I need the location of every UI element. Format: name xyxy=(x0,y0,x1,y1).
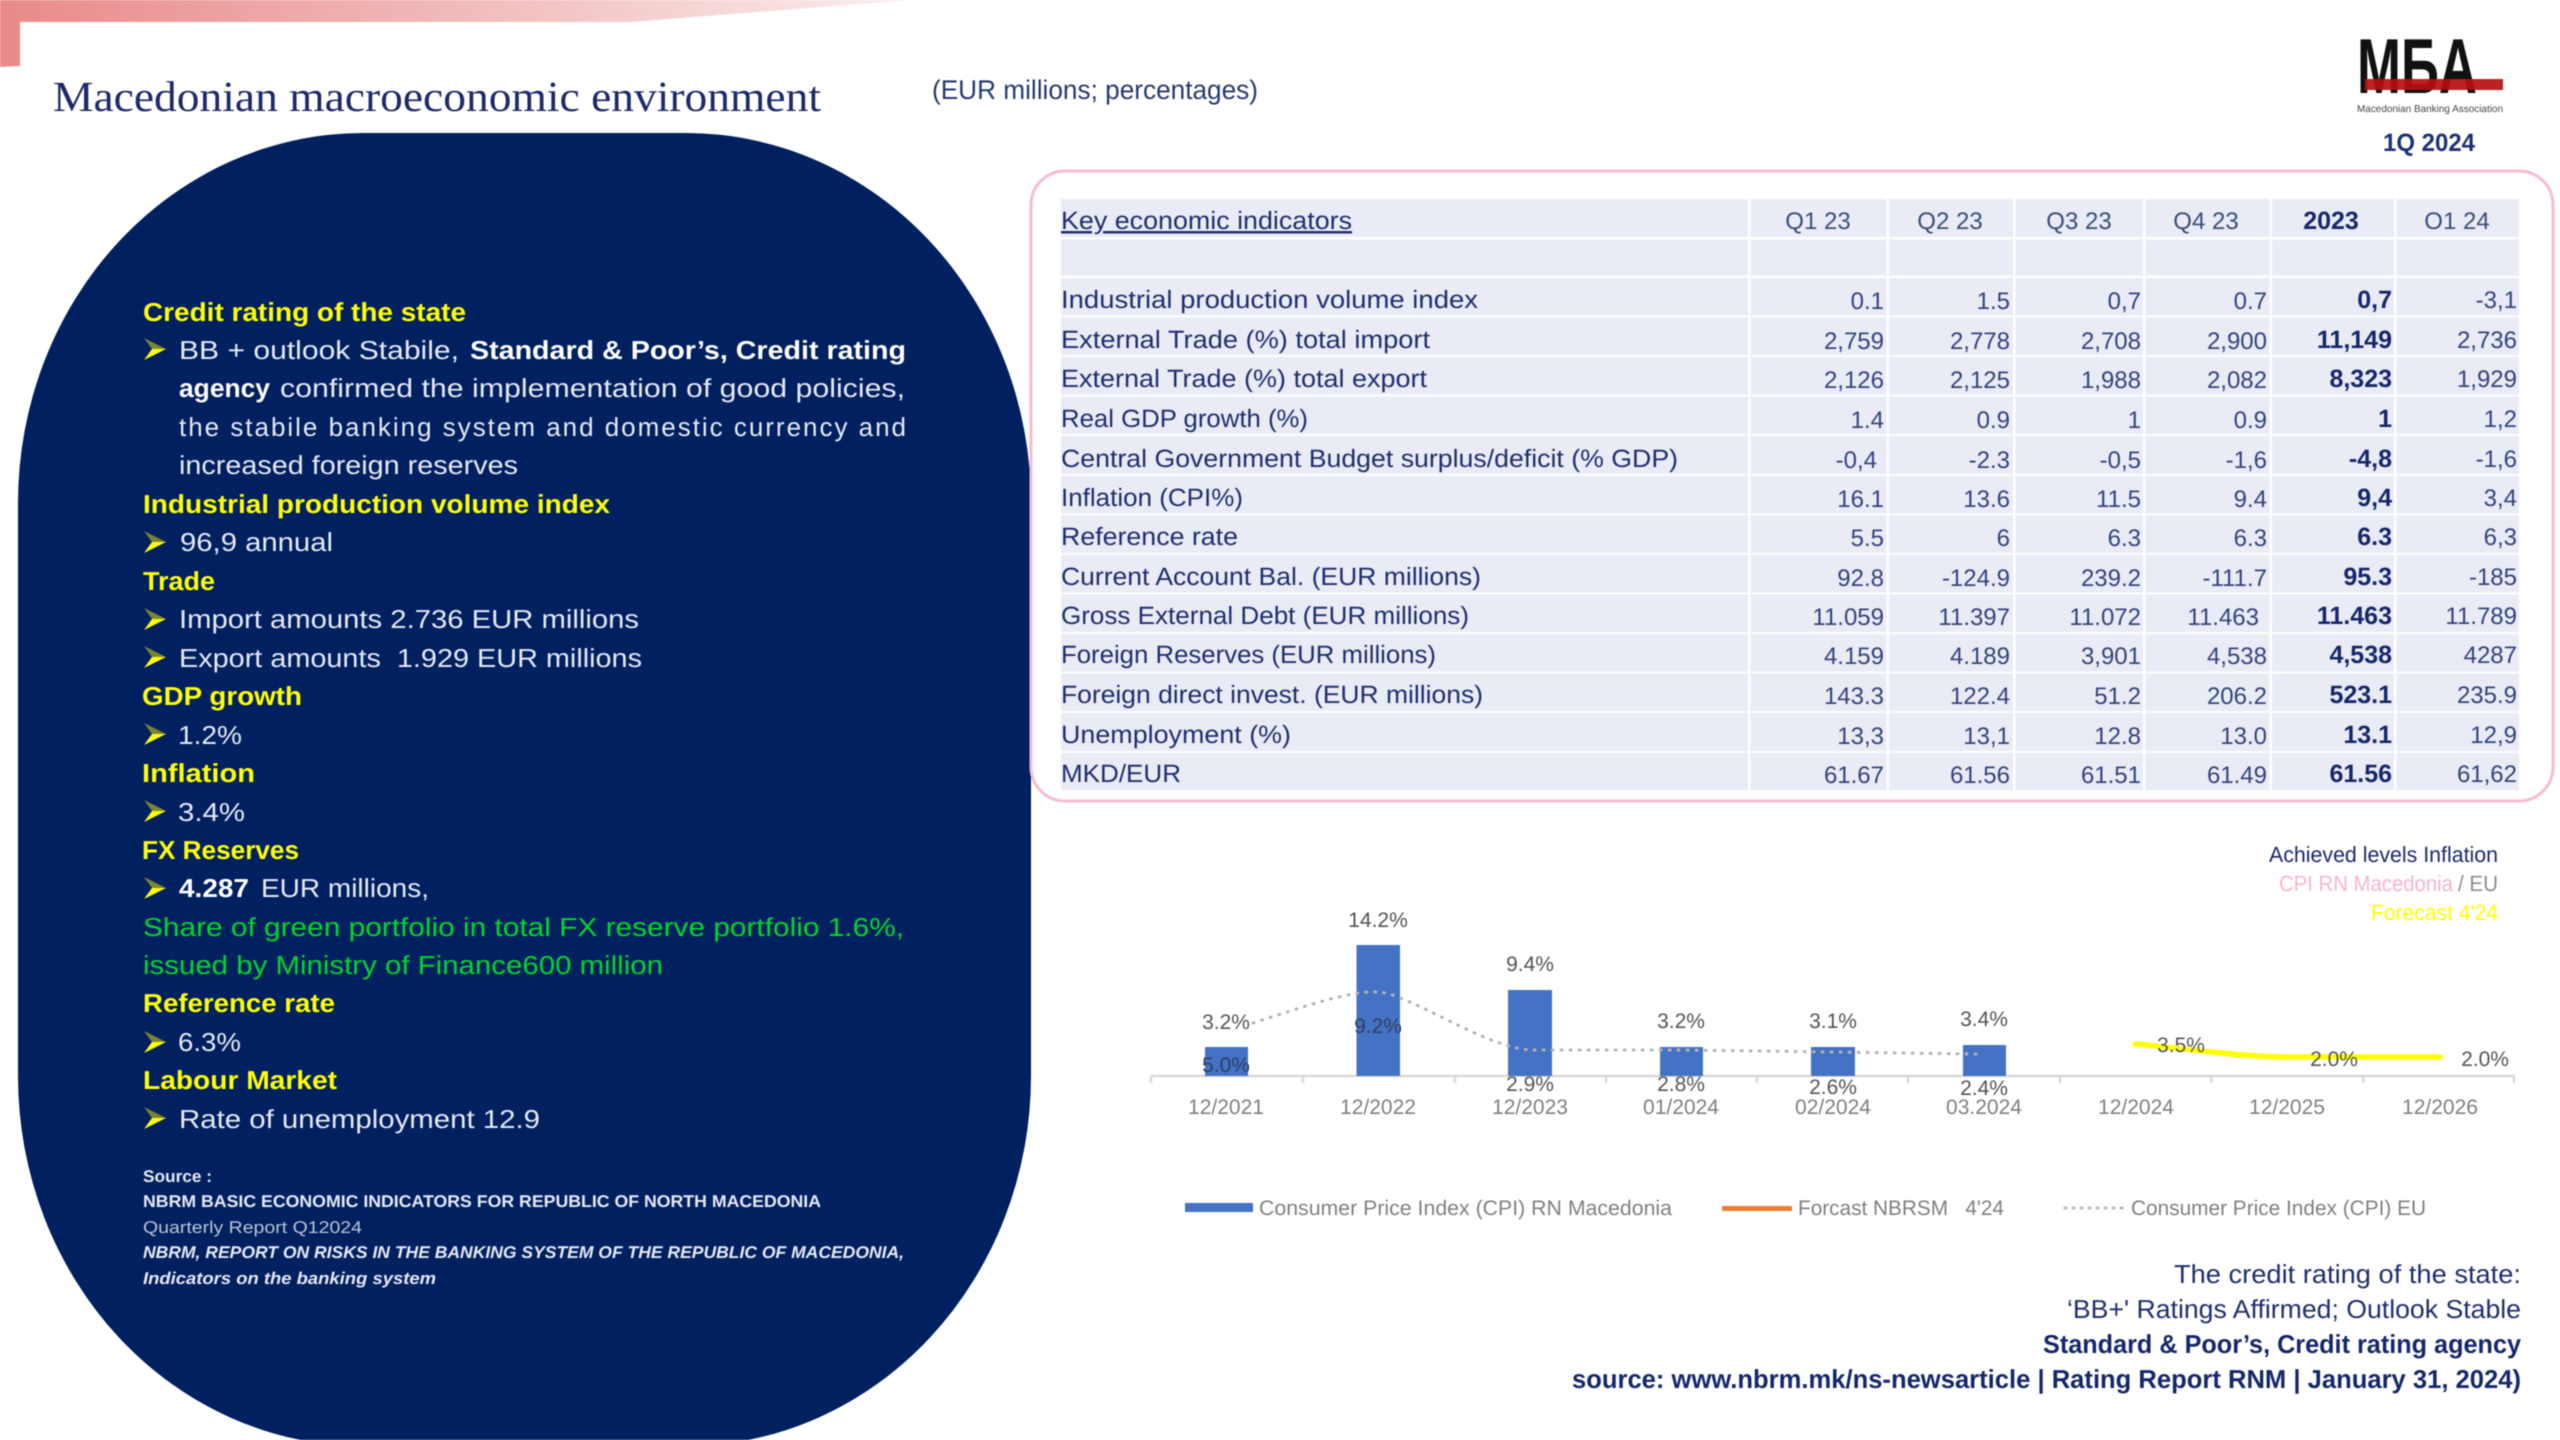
EU CPI dotted line xyxy=(1253,992,1979,1054)
chart title block: Forecast 4'24 xyxy=(2371,900,2498,925)
row: total import: 2,759 xyxy=(1824,328,1884,355)
row: industrial production: 0.7 xyxy=(2234,288,2267,315)
x axis labels: 01/2024 xyxy=(1643,1096,1719,1119)
row: MKD/EUR: 61.67 xyxy=(1824,762,1884,789)
row: industrial production: Industrial production volume index xyxy=(1061,286,1479,314)
row: real GDP growth: 1,2 xyxy=(2484,406,2517,433)
row: current account xyxy=(1061,563,2517,592)
row: external debt: 11.059 xyxy=(1812,604,1884,631)
row: unemployment: 13,1 xyxy=(1963,723,2010,750)
row: budget balance: Central Government Budget surplus/deficit (% GDP) xyxy=(1061,445,1678,473)
credit rating note xyxy=(1572,1259,2522,1394)
row: industrial production: 0.1 xyxy=(1851,288,1884,315)
x axis labels: 12/2022 xyxy=(1340,1096,1416,1119)
period label: 1Q 2024 xyxy=(2383,129,2475,157)
row: total import: 2,708 xyxy=(2081,328,2141,355)
CPI bars xyxy=(1205,945,2006,1076)
x axis labels: 12/2026 xyxy=(2402,1096,2478,1119)
panel: summary of indicators xyxy=(18,133,1031,1440)
forecast value labels: 3.5% xyxy=(2157,1034,2205,1057)
row: foreign reserves: Foreign Reserves (EUR millions) xyxy=(1061,641,1436,669)
heading: inflation: Inflation xyxy=(142,758,255,788)
row: MKD/EUR xyxy=(1061,760,2517,789)
row: external debt: 11.072 xyxy=(2069,604,2141,631)
row: inflation: Inflation (CPI%) xyxy=(1061,484,1243,512)
row: inflation: 9,4 xyxy=(2357,484,2392,512)
table header row: 2023 xyxy=(2303,207,2359,235)
forecast line xyxy=(2135,1044,2440,1057)
bullet: unemployment: Rate of unemployment 12.9 xyxy=(179,1104,540,1134)
row: total export: 8,323 xyxy=(2329,365,2392,393)
bullet block: credit rating detail: increased foreign reserves xyxy=(179,450,518,480)
row: foreign reserves: 4287 xyxy=(2464,642,2517,669)
row: reference rate xyxy=(1061,523,2517,552)
row: reference rate: 6.3 xyxy=(2108,525,2141,552)
heading: trade: Trade xyxy=(143,566,215,596)
row: current account: 239.2 xyxy=(2081,565,2141,592)
row: current account: -124.9 xyxy=(1942,565,2010,592)
heading: FX reserves: FX Reserves xyxy=(142,835,299,865)
table cell backgrounds xyxy=(1061,199,2519,790)
bullet: reference rate value xyxy=(144,1027,241,1057)
row: unemployment xyxy=(1061,721,2517,750)
credit rating note: The credit rating of the state: xyxy=(2174,1259,2521,1289)
row: total export: 1,929 xyxy=(2457,366,2517,393)
row: current account: -185 xyxy=(2469,564,2517,591)
row: real GDP growth: 0.9 xyxy=(1977,407,2010,434)
row: industrial production xyxy=(1061,286,2517,315)
bullet: import: Import amounts 2.736 EUR millions xyxy=(179,604,639,634)
credit rating note: Standard & Poor’s, Credit rating agency xyxy=(2043,1329,2522,1359)
row: MKD/EUR: 61.49 xyxy=(2207,762,2267,789)
heading: labour market: Labour Market xyxy=(143,1065,337,1095)
source notes: NBRM BASIC ECONOMIC INDICATORS FOR REPUBLIC OF NORTH MACEDONIA xyxy=(143,1192,821,1211)
row: budget balance: -0,4 xyxy=(1836,447,1877,474)
forecast value labels: 2.0% xyxy=(2310,1048,2358,1071)
row: external debt xyxy=(1061,602,2517,631)
row: total export: 2,082 xyxy=(2207,367,2267,394)
row: real GDP growth: 1 xyxy=(2378,405,2392,433)
row: unemployment: 13.1 xyxy=(2343,721,2392,749)
bullet block: credit rating detail: BB + outlook Stabile, xyxy=(179,335,459,365)
heading: industrial production: Industrial production volume index xyxy=(143,489,611,519)
bullet: inflation value xyxy=(144,797,245,827)
row: external debt: 11.463 xyxy=(2187,604,2259,631)
bullet block: credit rating detail: Standard & Poor’s, Credit rating xyxy=(470,335,906,365)
bullet block: credit rating detail: confirmed the implementation of good policies, xyxy=(280,373,905,403)
heading: GDP growth: GDP growth xyxy=(142,681,302,711)
row: MKD/EUR: MKD/EUR xyxy=(1061,760,1181,788)
bullet: FX reserves value xyxy=(144,873,429,903)
forecast value labels xyxy=(2157,1034,2509,1071)
row: MKD/EUR: 61.56 xyxy=(2329,760,2392,788)
bullet: inflation value: 3.4% xyxy=(178,797,245,827)
row: current account: -111.7 xyxy=(2202,565,2267,592)
row: reference rate: Reference rate xyxy=(1061,523,1238,551)
decorative header ribbon xyxy=(0,0,912,67)
note: green portfolio xyxy=(143,912,904,980)
row: external debt: 11.397 xyxy=(1938,604,2010,631)
row: foreign direct investment: 206.2 xyxy=(2207,683,2267,710)
note: green portfolio: issued by Ministry of Finance600 million xyxy=(143,950,663,980)
chart legend: Consumer Price Index (CPI) RN Macedonia xyxy=(1259,1197,1672,1220)
row: total import: 11,149 xyxy=(2317,326,2392,354)
bullet: FX reserves value: 4.287 xyxy=(179,873,249,903)
x axis labels: 03.2024 xyxy=(1946,1096,2022,1119)
row: total export xyxy=(1061,365,2517,394)
row: foreign reserves: 4,538 xyxy=(2329,641,2392,669)
row: total import: 2,736 xyxy=(2457,327,2517,354)
bullet block: credit rating detail xyxy=(144,335,906,480)
row: reference rate: 5.5 xyxy=(1851,525,1884,552)
row: total import xyxy=(1061,326,2517,355)
chart legend: Consumer Price Index (CPI) EU xyxy=(2131,1197,2426,1220)
source notes: NBRM, REPORT ON RISKS IN THE BANKING SYSTEM OF THE REPUBLIC OF MACEDONIA, xyxy=(143,1243,904,1262)
row: total export: 2,125 xyxy=(1950,367,2010,394)
CPI Macedonia value labels: 3.2% xyxy=(1202,1011,1250,1034)
row: total export: 2,126 xyxy=(1824,367,1884,394)
logo: Macedonian Banking Association: MБA xyxy=(2357,22,2477,110)
row: external debt: 11.789 xyxy=(2445,603,2517,630)
table header row: Q2 23 xyxy=(1917,208,1983,235)
row: reference rate: 6,3 xyxy=(2484,524,2517,551)
row: unemployment: 12,9 xyxy=(2470,722,2517,749)
chart title block: Achieved levels Inflation xyxy=(2269,842,2498,867)
forecast value labels: 2.0% xyxy=(2461,1048,2509,1071)
row: inflation: 11.5 xyxy=(2096,486,2141,513)
row: budget balance: -1,6 xyxy=(2226,447,2267,474)
bullet: export: Export amounts 1.929 EUR millions xyxy=(179,643,642,673)
row: foreign reserves: 4,538 xyxy=(2207,643,2267,670)
source notes: Indicators on the banking system xyxy=(143,1269,436,1288)
CPI Macedonia value labels xyxy=(1202,909,2008,1034)
row: budget balance: -4,8 xyxy=(2349,445,2392,473)
x axis labels: 12/2024 xyxy=(2098,1096,2174,1119)
row: current account: 95.3 xyxy=(2343,563,2392,591)
chart title block: CPI RN Macedonia xyxy=(2279,871,2454,896)
row: budget balance: -1,6 xyxy=(2476,446,2517,473)
source notes: Source : xyxy=(143,1167,212,1186)
credit rating note: ‘BB+' Ratings Affirmed; Outlook Stable xyxy=(2067,1294,2521,1324)
heading: reference rate: Reference rate xyxy=(143,988,335,1018)
row: total export: 1,988 xyxy=(2081,367,2141,394)
table header row: Q4 23 xyxy=(2173,208,2239,235)
note: green portfolio: Share of green portfolio in total FX reserve portfolio 1.6%, xyxy=(143,912,904,942)
CPI EU value labels: 9.2% xyxy=(1354,1015,1402,1038)
row: total import: 2,778 xyxy=(1950,328,2010,355)
chart legend xyxy=(1185,1197,2426,1220)
x axis labels: 12/2021 xyxy=(1188,1096,1264,1119)
row: reference rate: 6.3 xyxy=(2234,525,2267,552)
row: inflation: 3,4 xyxy=(2484,485,2517,512)
x axis labels: 12/2023 xyxy=(1492,1096,1568,1119)
row: foreign reserves xyxy=(1061,641,2517,670)
row: MKD/EUR: 61.56 xyxy=(1950,762,2010,789)
x axis labels: 02/2024 xyxy=(1795,1096,1871,1119)
row: total export: External Trade (%) total export xyxy=(1061,365,1427,393)
row: unemployment: 12.8 xyxy=(2094,723,2141,750)
source notes xyxy=(143,1167,904,1288)
CPI Macedonia value labels: 9.4% xyxy=(1506,953,1554,976)
CPI EU value labels: 2.4% xyxy=(1960,1077,2008,1100)
row: foreign reserves: 4.159 xyxy=(1824,643,1884,670)
row: inflation: 16.1 xyxy=(1837,486,1884,513)
row: real GDP growth: 0.9 xyxy=(2234,407,2267,434)
row: reference rate: 6 xyxy=(1997,525,2010,552)
row: total import: External Trade (%) total import xyxy=(1061,326,1430,354)
row: MKD/EUR: 61,62 xyxy=(2457,761,2517,788)
chart title block xyxy=(2269,842,2498,925)
CPI EU value labels: 2.9% xyxy=(1506,1073,1554,1096)
credit rating note: source: www.nbrm.mk/ns-newsarticle | Rating Report RNM | January 31, 2024) xyxy=(1572,1364,2521,1394)
row: current account: 92.8 xyxy=(1837,565,1884,592)
row: real GDP growth xyxy=(1061,405,2517,434)
row: unemployment: Unemployment (%) xyxy=(1061,721,1291,749)
table header row: Key economic indicators xyxy=(1061,207,1352,235)
row: real GDP growth: Real GDP growth (%) xyxy=(1061,405,1308,433)
x axis labels xyxy=(1188,1096,2478,1119)
table header row: Q3 23 xyxy=(2046,208,2112,235)
CPI EU value labels: 2.6% xyxy=(1809,1076,1857,1099)
row: foreign direct investment xyxy=(1061,681,2517,710)
row: budget balance: -2.3 xyxy=(1969,447,2010,474)
row: external debt: 11.463 xyxy=(2317,602,2392,630)
title: Macedonian macroeconomic environment xyxy=(53,74,821,121)
bullet: industrial production value: 96,9 annual xyxy=(180,527,333,557)
row: current account: Current Account Bal. (EUR millions) xyxy=(1061,563,1481,591)
bullet: GDP value xyxy=(144,720,242,750)
row: foreign direct investment: 523.1 xyxy=(2329,681,2392,709)
row: foreign direct investment: 51.2 xyxy=(2094,683,2141,710)
row: industrial production: 0,7 xyxy=(2357,286,2392,314)
row: reference rate: 6.3 xyxy=(2357,523,2392,551)
row: industrial production: 0,7 xyxy=(2108,288,2141,315)
row: industrial production: -3,1 xyxy=(2476,287,2517,314)
row: inflation: 13.6 xyxy=(1963,486,2010,513)
CPI Macedonia value labels: 3.1% xyxy=(1809,1010,1857,1033)
row: inflation: 9.4 xyxy=(2234,486,2267,513)
table header row: Q1 23 xyxy=(1785,208,1851,235)
row: unemployment: 13.0 xyxy=(2220,723,2267,750)
row: budget balance: -0,5 xyxy=(2100,447,2141,474)
row: MKD/EUR: 61.51 xyxy=(2081,762,2141,789)
CPI Macedonia value labels: 3.4% xyxy=(1960,1008,2008,1031)
heading: credit rating: Credit rating of the state xyxy=(143,297,466,327)
row: budget balance xyxy=(1061,445,2517,474)
CPI Macedonia value labels: 3.2% xyxy=(1657,1010,1705,1033)
bullet: reference rate value: 6.3% xyxy=(178,1027,241,1057)
row: inflation xyxy=(1061,484,2517,513)
table header row: O1 24 xyxy=(2424,208,2490,235)
table header row xyxy=(1061,207,2490,235)
x axis xyxy=(1151,1076,2514,1083)
row: foreign reserves: 3,901 xyxy=(2081,643,2141,670)
bullet block: credit rating detail: agency xyxy=(179,373,271,403)
CPI EU value labels: 5.0% xyxy=(1202,1054,1250,1077)
x axis labels: 12/2025 xyxy=(2249,1096,2325,1119)
row: foreign direct investment: 143.3 xyxy=(1824,683,1884,710)
chart legend: Forcast NBRSM 4'24 xyxy=(1798,1197,2004,1220)
CPI EU value labels: 2.8% xyxy=(1657,1073,1705,1096)
row: foreign direct investment: Foreign direct invest. (EUR millions) xyxy=(1061,681,1483,709)
row: total import: 2,900 xyxy=(2207,328,2267,355)
row: foreign direct investment: 235.9 xyxy=(2457,682,2517,709)
CPI EU value labels xyxy=(1202,1015,2008,1100)
row: real GDP growth: 1 xyxy=(2128,407,2141,434)
units note: (EUR millions; percentages) xyxy=(932,75,1258,105)
row: industrial production: 1.5 xyxy=(1977,288,2010,315)
source notes: Quarterly Report Q12024 xyxy=(143,1218,362,1237)
row: foreign reserves: 4.189 xyxy=(1950,643,2010,670)
chart: CPI inflation combo chart xyxy=(1151,909,2514,1119)
row: unemployment: 13,3 xyxy=(1837,723,1884,750)
row: external debt: Gross External Debt (EUR millions) xyxy=(1061,602,1469,630)
row: foreign direct investment: 122.4 xyxy=(1950,683,2010,710)
bullet block: credit rating detail: the stabile banking system and domestic currency and xyxy=(179,412,906,442)
chart title block: / EU xyxy=(2458,871,2498,896)
bullet: GDP value: 1.2% xyxy=(178,720,242,750)
panel: key economic indicators table xyxy=(1031,171,2553,801)
logo: Macedonian Banking Association: Macedonian Banking Association xyxy=(2357,104,2503,115)
CPI Macedonia value labels: 14.2% xyxy=(1348,909,1408,932)
row: real GDP growth: 1.4 xyxy=(1851,407,1884,434)
bullet: FX reserves value: EUR millions, xyxy=(261,873,429,903)
